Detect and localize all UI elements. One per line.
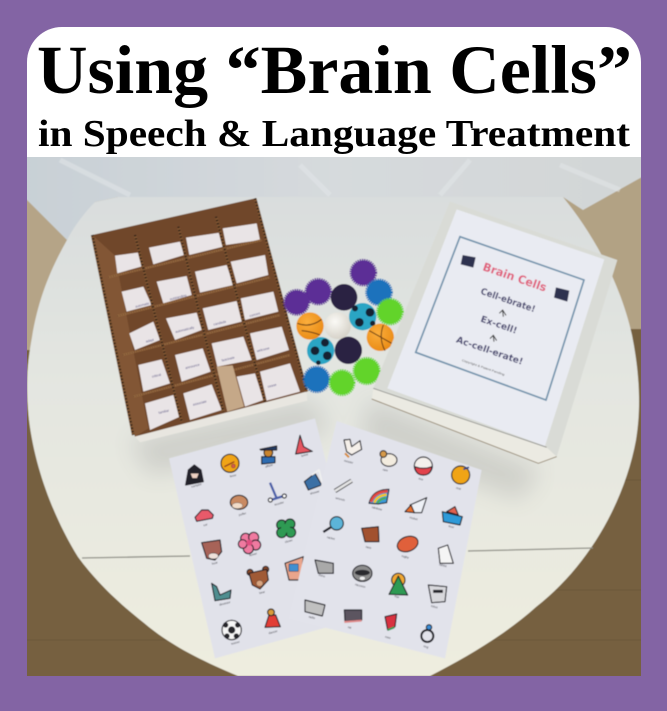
labels: right sheet: ram [382, 467, 389, 473]
box label paper [387, 209, 604, 446]
rooster [344, 439, 362, 457]
card words [135, 293, 277, 415]
table seams [82, 548, 593, 558]
rainbow [369, 489, 389, 504]
card words: welcome [256, 346, 270, 353]
labels: right sheet: raccoon [355, 582, 366, 589]
ring [421, 625, 433, 642]
shower [304, 470, 322, 490]
labels: right sheet: racket [326, 535, 336, 541]
left sheet [169, 418, 326, 658]
arrow up [499, 310, 506, 317]
vampire [186, 465, 203, 485]
clover [277, 519, 296, 538]
icons: left sheet [186, 435, 322, 640]
title panel [27, 27, 641, 157]
labels: left sheet [191, 452, 320, 646]
river [442, 507, 462, 525]
car [195, 510, 213, 521]
dancer [265, 609, 280, 627]
rabbit [438, 545, 453, 563]
level: ac-cell-erate: Ac-cell-erate! [455, 335, 524, 368]
card words: adapt [145, 338, 154, 344]
labels: right sheet: rocket [409, 515, 418, 521]
compartment cards [115, 223, 300, 430]
cardboard dividers [92, 198, 307, 435]
rat [344, 610, 362, 622]
level: cell-ebrate: Cell-ebrate! [479, 287, 536, 315]
tray body [92, 198, 307, 437]
soft shadows [130, 400, 540, 500]
labels: left sheet: soccer [231, 640, 240, 646]
rugby [395, 533, 420, 555]
labels: left sheet: fever [229, 473, 237, 478]
spiky purple balls [285, 260, 376, 314]
photograph [17, 147, 651, 686]
copyright note: Copyright & Patent Pending [461, 358, 506, 377]
tower [296, 435, 312, 454]
labels: right sheet: rooster [344, 459, 354, 465]
right sheet [289, 421, 482, 658]
card words: critical [151, 373, 162, 379]
labels: left sheet: car [203, 522, 208, 527]
card words: outstanding [169, 293, 187, 301]
card words: cease [267, 383, 277, 389]
spiky green balls [330, 299, 402, 395]
labels: left sheet: dinosaur [219, 600, 231, 607]
rice [414, 457, 432, 475]
racket [323, 517, 343, 532]
dinosaur [212, 583, 231, 601]
card words: fascinate [221, 355, 235, 363]
flower [238, 532, 261, 554]
picture sheets [169, 418, 482, 658]
puffer [230, 495, 248, 509]
labels: right sheet: robot [430, 604, 438, 610]
labels: left sheet: clover [284, 538, 293, 544]
icons: right sheet [305, 439, 470, 642]
labels: right sheet: rest [456, 486, 462, 491]
labels: right sheet: radio [308, 615, 316, 620]
photo: round white table [27, 197, 639, 676]
labels: right sheet: ring [423, 644, 429, 649]
labels: right sheet: rice [418, 476, 424, 482]
labels: right sheet: rabbit [439, 562, 447, 568]
rhino [315, 560, 333, 573]
labels: right sheet [308, 459, 462, 649]
labels: right sheet: river [448, 524, 455, 529]
level: ex-cell: Ex-cell! [479, 315, 518, 337]
labels: right sheet: race [365, 545, 372, 550]
labels: left sheet: boar [211, 560, 218, 566]
soccer ball [222, 620, 241, 640]
labels: left sheet: vampire [191, 482, 202, 489]
orange balls [296, 312, 394, 351]
labels: left sheet: dancer [268, 629, 278, 635]
labels: left sheet: puffer [238, 511, 247, 517]
spiky blue balls [304, 280, 391, 392]
arrow up [490, 335, 497, 342]
cardboard sorting tray [92, 198, 307, 442]
white box [372, 202, 617, 463]
rest [452, 466, 470, 484]
officer [260, 446, 277, 464]
labels: right sheet: rose [385, 635, 392, 640]
blue frame [416, 237, 584, 400]
subtitle: in Speech & Language Treatment [38, 113, 630, 155]
scooter [268, 483, 287, 502]
white ball [324, 312, 351, 339]
labels: left sheet: scooter [274, 500, 284, 507]
labels: left sheet: flower [249, 551, 257, 557]
card words: announce [185, 363, 200, 370]
labels: right sheet: rise [394, 594, 400, 599]
labels: left sheet: officer [265, 463, 273, 469]
rise [389, 573, 408, 595]
robot [428, 585, 447, 603]
wrench [335, 481, 352, 491]
dark navy balls [331, 284, 362, 364]
labels: right sheet: rhino [318, 573, 326, 579]
radio [305, 600, 325, 616]
title: Using “Brain Cells” [37, 32, 632, 108]
bear [247, 566, 269, 589]
card words: concert [249, 311, 261, 318]
raccoon [353, 565, 372, 581]
race [362, 527, 379, 542]
labels: left sheet: shower [310, 489, 320, 496]
card words: automatic [135, 301, 150, 309]
boar [202, 540, 222, 560]
photo: backdrop and floor [17, 147, 651, 686]
card words: automatically [175, 325, 195, 334]
labels: right sheet: rat [347, 625, 352, 630]
blue soccer balls [307, 303, 376, 365]
card words: associate [192, 399, 207, 407]
label heading: Brain Cells [481, 260, 549, 295]
rose [385, 614, 397, 630]
labels: right sheet: rugby [401, 554, 410, 560]
balls and white box [285, 202, 617, 463]
card words: familiar [158, 408, 170, 415]
wooden clothespin [217, 365, 244, 412]
brain cell squares [461, 255, 476, 268]
labels: right sheet: rainbow [371, 505, 383, 512]
card words: candada [213, 320, 227, 327]
rocket [405, 498, 427, 513]
ram [380, 451, 397, 466]
fever [221, 454, 239, 472]
labels: left sheet: tower [301, 452, 309, 458]
building [285, 557, 303, 580]
labels: right sheet: wrench [335, 496, 346, 502]
labels: left sheet: bear [259, 590, 265, 595]
